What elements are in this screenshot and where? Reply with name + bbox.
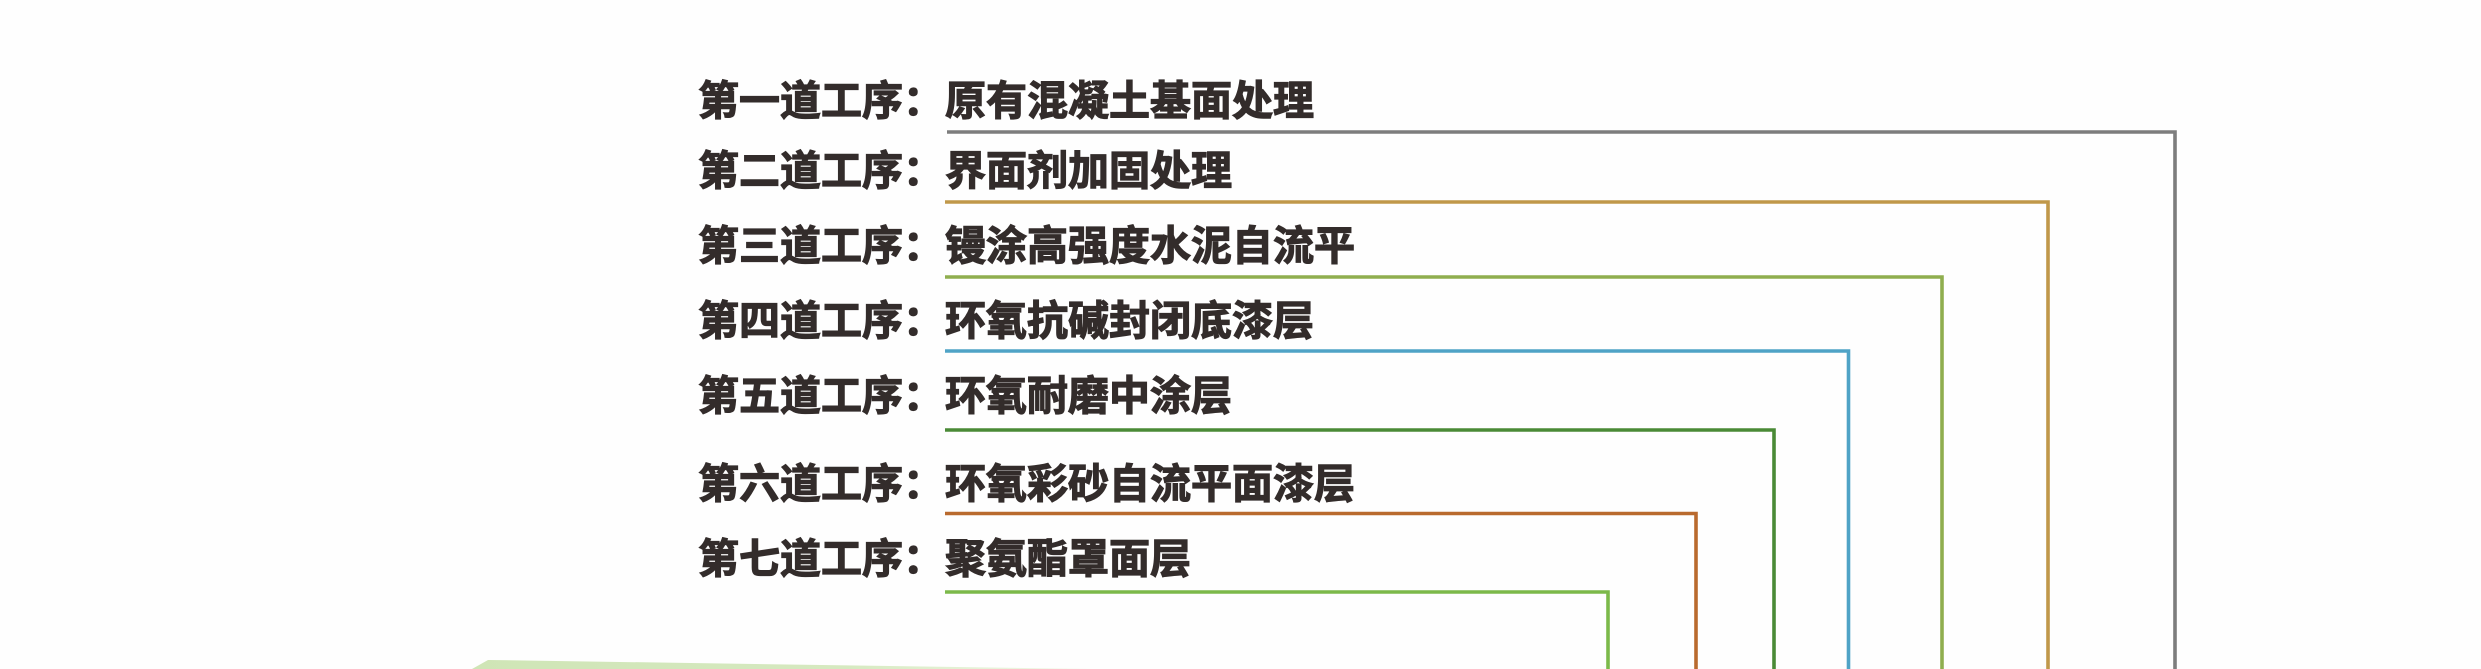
- step 4 label: 第四道工序：: [698, 298, 944, 344]
- step 1 leader line: [947, 132, 2175, 669]
- step 4 name: 环氧抗碱封闭底漆层: [945, 298, 1314, 344]
- step 3 label: 第三道工序：: [698, 223, 944, 269]
- step 2 leader line: [945, 202, 2048, 669]
- step 3: [698, 223, 1942, 669]
- step 7 name: 聚氨酯罩面层: [945, 536, 1191, 582]
- step 2 name: 界面剂加固处理: [945, 148, 1232, 194]
- step 6 label: 第六道工序：: [698, 461, 944, 507]
- step 7 leader line: [945, 592, 1608, 669]
- step 6: [698, 461, 1696, 669]
- step 2 label: 第二道工序：: [698, 148, 944, 194]
- step 4: [698, 298, 1848, 669]
- step 5: [698, 373, 1774, 669]
- step 1 name: 原有混凝土基面处理: [945, 78, 1314, 124]
- step 6 leader line: [945, 514, 1696, 669]
- step 7 label: 第七道工序：: [698, 536, 944, 582]
- step 1: [698, 78, 2175, 669]
- step 4 leader line: [945, 351, 1848, 669]
- step 5 label: 第五道工序：: [698, 373, 944, 419]
- step 7: [698, 536, 1608, 669]
- floor layer wedge: [472, 660, 1095, 669]
- step 1 label: 第一道工序：: [698, 78, 944, 124]
- step 5 name: 环氧耐磨中涂层: [945, 373, 1232, 419]
- step 5 leader line: [945, 430, 1774, 669]
- step 2: [698, 148, 2048, 669]
- step 3 name: 镘涂高强度水泥自流平: [945, 223, 1355, 269]
- step 6 name: 环氧彩砂自流平面漆层: [945, 461, 1355, 507]
- step 3 leader line: [945, 277, 1942, 669]
